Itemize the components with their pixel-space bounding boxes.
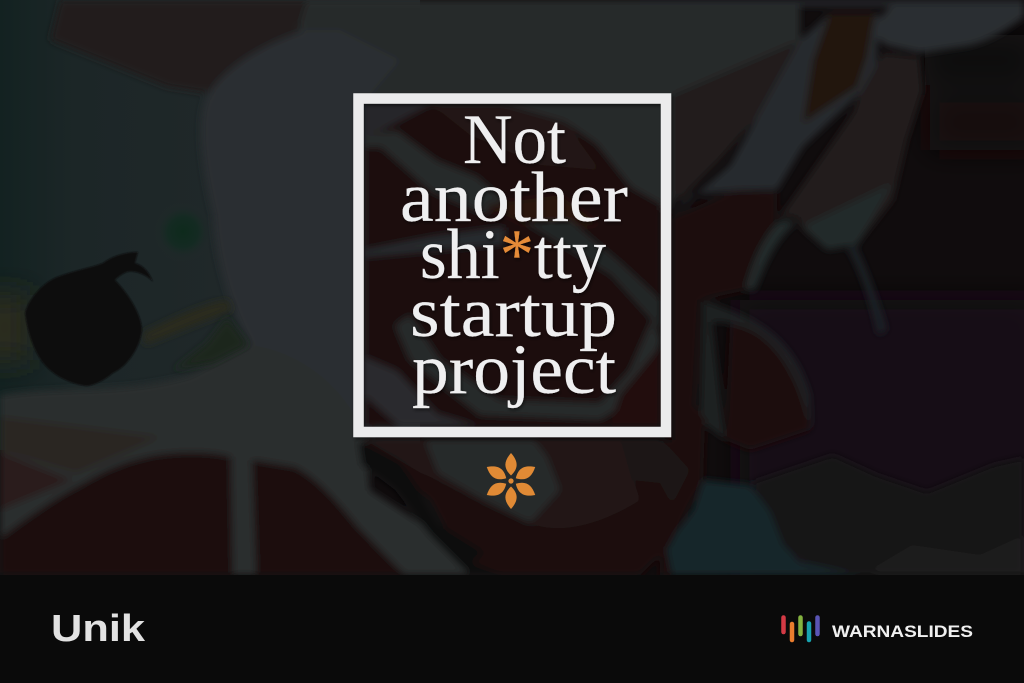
lower left dark red petal [0,452,233,575]
frame interior [364,104,661,427]
top centre and right haze [300,0,800,210]
title: another [400,159,628,237]
icon: Warnaslides logo bars [784,618,818,640]
green blur behind bud [166,216,200,248]
rose bud and stem [25,252,248,386]
title: startup [410,274,617,352]
upper right red petal [803,13,875,123]
soft colour washes [0,0,1024,486]
title: Not [463,101,566,179]
title: project [412,331,616,409]
dark red right mid [725,325,810,450]
lower right petals [753,455,1024,575]
footer label: Unik: Unik [51,608,146,650]
lower left grey petals [0,345,470,575]
footer bar [0,575,1024,683]
icon: orange six-petal flower [484,453,538,509]
upper right brown wedge [676,48,796,198]
white square frame [358,98,666,432]
dark crack [358,441,488,573]
lower left brown patches [0,420,142,468]
petal around flower [360,437,640,528]
brand name: WARNASLIDES: WARNASLIDES [832,623,973,641]
title [400,101,628,409]
large left petal of central rose [201,30,400,440]
title: shi*tty [420,216,606,294]
upper dark red below band [672,190,778,402]
top brown shadow [50,0,307,93]
red region below frame [360,372,705,575]
petal stem lines [745,220,797,290]
upper right grey petal band [672,13,880,215]
teal gap bottom centre [660,480,860,575]
right hanging petal [780,53,923,250]
top right pale petal [873,0,1024,53]
